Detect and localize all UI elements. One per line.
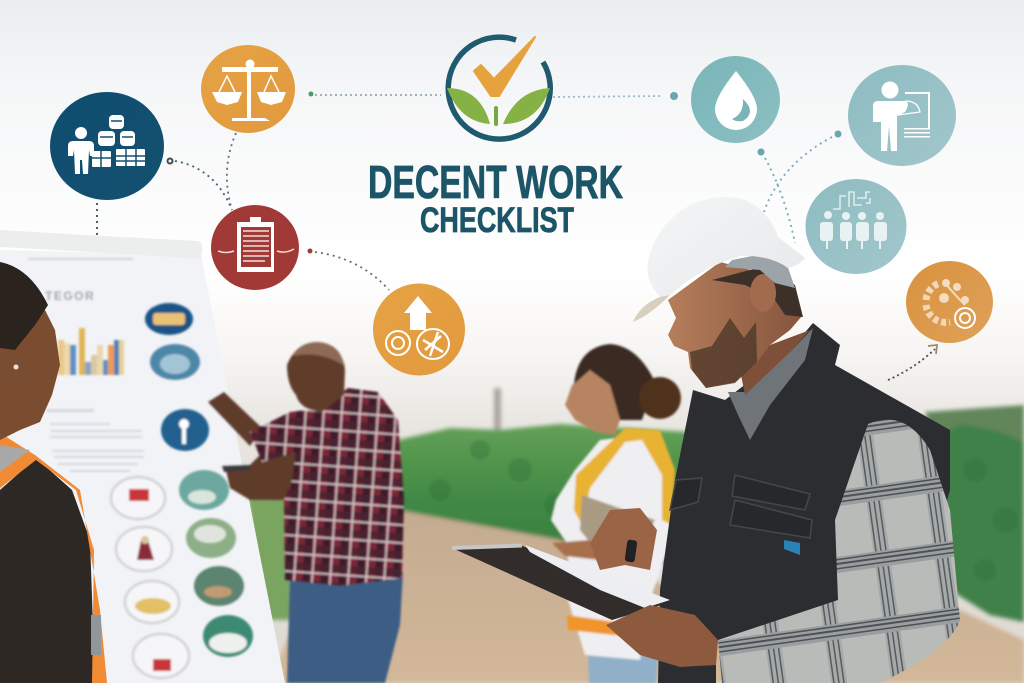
connector: logo to drop <box>553 92 678 100</box>
vest pockets <box>670 475 812 538</box>
shirt body <box>250 388 404 586</box>
title <box>368 156 623 240</box>
blurred chart content <box>28 258 253 678</box>
orange vest <box>0 433 107 683</box>
blue badge <box>784 540 800 555</box>
logo ring <box>448 37 550 139</box>
clipboard <box>452 545 668 620</box>
right man inspector <box>452 197 960 683</box>
face and neck <box>0 300 60 440</box>
forearm raised to chart <box>208 392 262 446</box>
icon: gears and circle <box>906 261 993 343</box>
yellow vest straps <box>574 428 675 525</box>
chart roll <box>0 230 202 259</box>
title: DECENT WORK <box>368 156 623 208</box>
title: CHECKLIST <box>420 201 574 240</box>
face <box>668 262 802 388</box>
bar chart <box>58 328 124 375</box>
arrow to gear icon <box>888 345 937 380</box>
beard <box>690 318 757 388</box>
leaves <box>447 88 490 124</box>
head <box>287 342 345 412</box>
neck <box>740 330 810 395</box>
ear <box>750 274 776 312</box>
logo <box>447 37 550 139</box>
icon: water drop <box>691 56 780 143</box>
connector: scales to maroon <box>227 133 236 210</box>
background field and road <box>248 388 1024 683</box>
shirt <box>551 435 675 660</box>
collar and shirt <box>728 328 813 440</box>
connector: blue vertical dotted <box>96 203 98 238</box>
gray plaid sleeve <box>718 420 960 683</box>
icon: up arrow with gears <box>373 284 465 376</box>
icon: seated group <box>806 179 906 274</box>
icon: presenter at board <box>848 65 956 166</box>
head and hair <box>565 370 620 435</box>
connector: teal crossing lines <box>758 130 842 243</box>
middle man in plaid shirt <box>208 342 404 683</box>
helmet strap <box>725 250 795 288</box>
lower hand <box>606 605 718 667</box>
blurred chart content: TEGOR <box>45 289 95 303</box>
icon: balance scales <box>201 45 295 133</box>
clipboard hand with pen <box>590 508 657 570</box>
connector: scales to logo <box>308 92 441 96</box>
middle woman with vest <box>551 344 681 683</box>
dark sweater <box>0 458 95 683</box>
connector: maroon to orange <box>308 248 389 290</box>
jeans <box>287 572 403 683</box>
left woman foreground <box>0 262 107 683</box>
connector: blue to maroon <box>168 158 232 210</box>
chart paper <box>0 250 285 683</box>
icon: clipboard document <box>211 205 299 290</box>
flip chart <box>0 230 285 683</box>
jeans <box>588 652 658 683</box>
orange check mark <box>474 37 535 96</box>
lower forearm with phone <box>226 450 310 500</box>
hair <box>712 266 803 317</box>
icon: worker with crates <box>50 92 164 200</box>
hair <box>0 262 48 350</box>
white hard hat <box>633 197 805 322</box>
vest body <box>658 323 950 683</box>
